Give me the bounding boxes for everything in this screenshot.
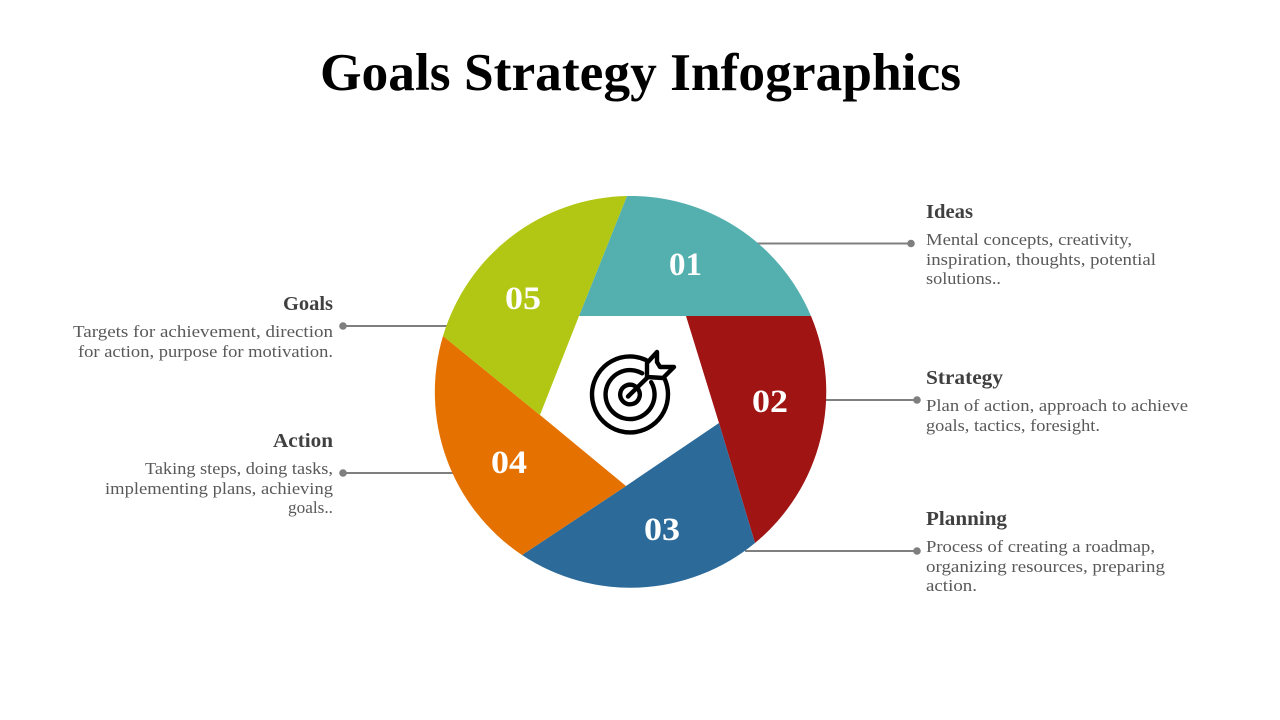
connector: Action [339, 469, 454, 477]
text block: Ideas: Mental concepts, creativity, [926, 230, 1132, 249]
text block: Goals [73, 293, 334, 361]
text block: Strategy: Plan of action, approach to achieve [926, 396, 1188, 415]
text block: Ideas: inspiration, thoughts, potential [926, 250, 1156, 269]
text block: Goals: Goals [283, 293, 333, 315]
icon: target with arrow [592, 352, 674, 432]
text block: Goals: for action, purpose for motivation. [78, 342, 333, 361]
text block: Ideas: Ideas [926, 201, 973, 223]
title: Goals Strategy Infographics [320, 44, 961, 102]
text block: Action: Taking steps, doing tasks, [145, 459, 333, 478]
segment 01: teal [579, 196, 811, 316]
segment 04: orange [435, 336, 626, 555]
text block: Action: implementing plans, achieving [105, 479, 334, 498]
segment 03: blue: 03 [644, 512, 680, 548]
segment 03: blue [522, 423, 755, 588]
text block: Strategy: goals, tactics, foresight. [926, 416, 1100, 435]
connector: Planning [745, 547, 921, 555]
text block: Planning: action. [926, 576, 977, 595]
segment 05: green: 05 [505, 281, 541, 317]
connector: Goals [339, 322, 447, 330]
text block: Strategy: Strategy [926, 367, 1003, 389]
text block: Planning [926, 508, 1166, 595]
text block: Planning: organizing resources, preparing [926, 557, 1166, 576]
text block: Action: Action [273, 430, 333, 452]
text block: Ideas [926, 201, 1156, 288]
text block: Goals: Targets for achievement, direction [73, 322, 334, 341]
text block: Ideas: solutions.. [926, 269, 1001, 288]
segment 02: red: 02 [752, 384, 788, 420]
text block: Planning: Process of creating a roadmap, [926, 537, 1155, 556]
text block: Planning: Planning [926, 508, 1007, 530]
connector: Ideas [755, 240, 915, 247]
text block: Action: goals.. [288, 498, 333, 517]
segment 01: teal: 01 [669, 247, 702, 283]
segment 02: red [686, 316, 826, 543]
segment 04: orange: 04 [491, 445, 527, 481]
text block: Action [105, 430, 334, 517]
text block: Strategy [926, 367, 1188, 435]
segment 05: green [443, 196, 627, 415]
connector: Strategy [824, 396, 921, 404]
